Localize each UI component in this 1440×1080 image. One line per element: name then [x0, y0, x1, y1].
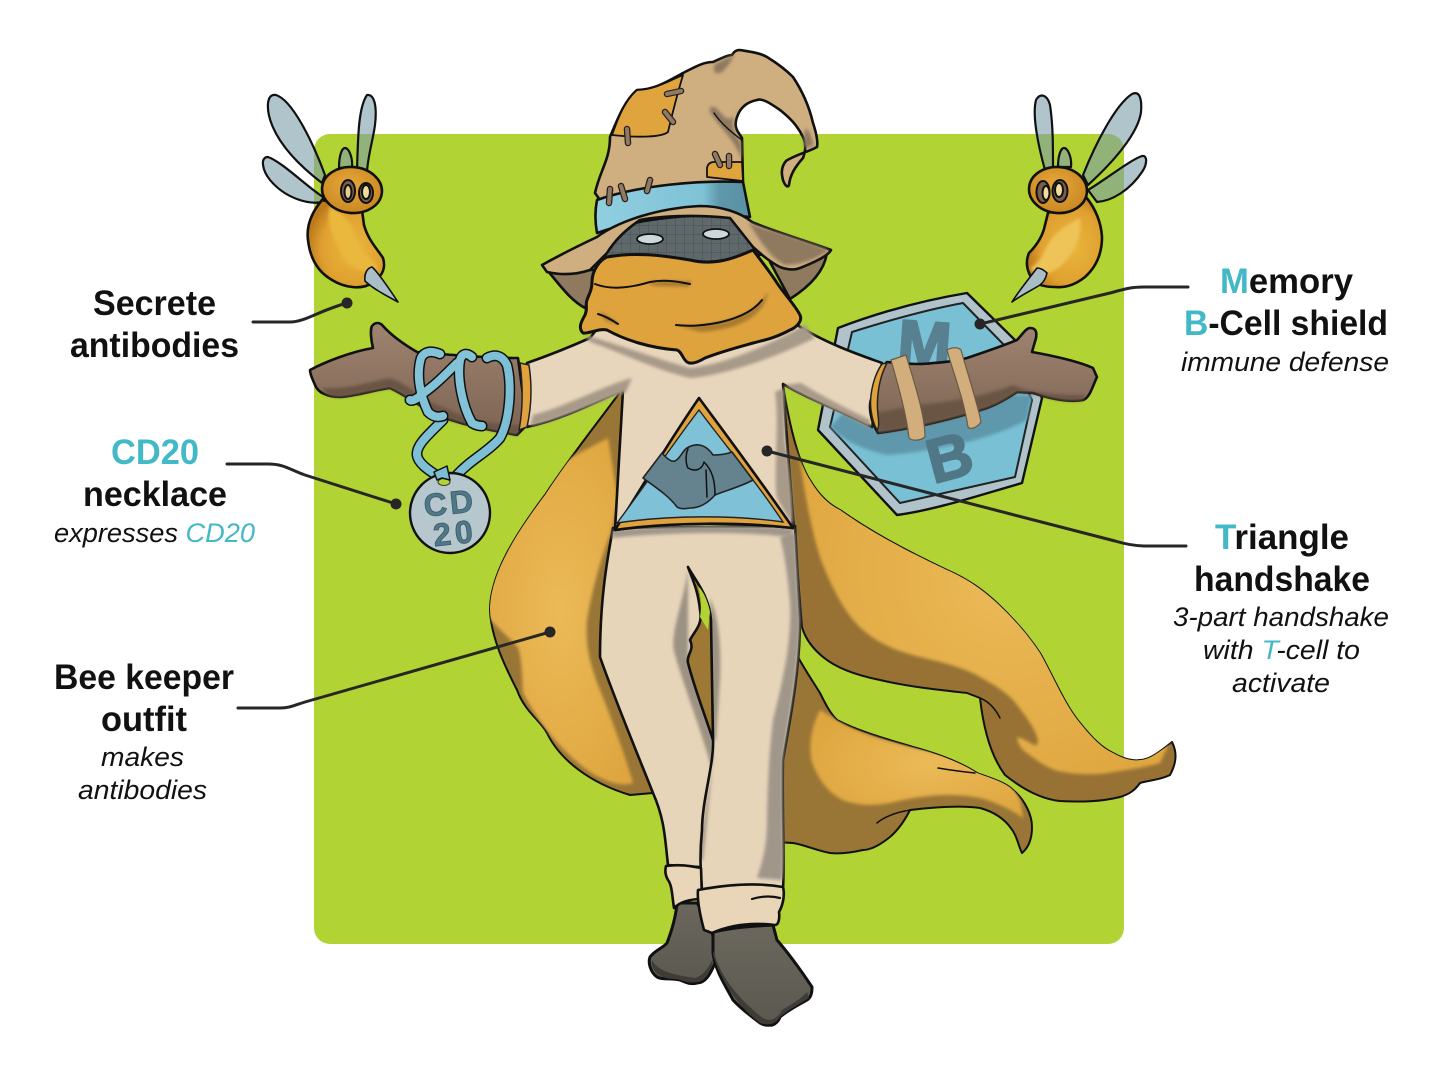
shield [818, 293, 1042, 515]
cape: lower right tail [784, 658, 1033, 854]
trousers [600, 526, 800, 892]
label: triangle handshake: handshake [1194, 560, 1370, 599]
glove shadow [322, 378, 520, 435]
brim right shade [748, 222, 829, 265]
gap between the legs [688, 567, 713, 740]
label: triangle handshake: Triangle [1215, 518, 1349, 557]
left cuff [665, 865, 702, 908]
bee body [1027, 197, 1102, 287]
leader line: bee keeper outfit [238, 626, 556, 708]
bee wings [1035, 93, 1146, 202]
label: memory B-cell shield: Memory [1220, 262, 1354, 301]
label: triangle handshake [1173, 518, 1389, 698]
bee head [1027, 165, 1089, 215]
stitches [609, 91, 729, 203]
triangle emblem [615, 398, 793, 530]
bee body [308, 200, 384, 287]
left arm with glove [310, 323, 531, 435]
green seen between legs [698, 586, 710, 630]
leader line: memory B-cell shield [974, 287, 1188, 330]
hat patch small [707, 162, 743, 181]
label: CD20 necklace: expresses CD20 [54, 518, 255, 548]
letter B: B [919, 419, 980, 497]
medal number: 20 [431, 513, 478, 553]
trouser shading inner leg [673, 567, 720, 860]
label: CD20 necklace [54, 433, 255, 548]
hat brim rear flaps [547, 252, 827, 308]
medal text: CD [422, 482, 478, 524]
left shoe [649, 903, 715, 984]
bee stinger [365, 267, 398, 302]
label: secrete antibodies [70, 284, 239, 365]
character illustration [310, 50, 1190, 1025]
leader line: triangle handshake [762, 446, 1186, 546]
label: bee keeper outfit: makes [101, 742, 184, 772]
green background panel [314, 134, 1124, 944]
mesh face [600, 215, 760, 265]
blue ribbons around arm with medal cord [410, 352, 510, 476]
ribbon knot [434, 466, 450, 480]
tan strap [947, 348, 981, 428]
leader line: CD20 necklace [227, 464, 402, 510]
shield shadow [830, 395, 1032, 455]
CD20 medal [410, 466, 490, 553]
neck shadow [585, 325, 815, 378]
leader line: secrete antibodies [253, 298, 352, 322]
bee eyes [341, 180, 373, 203]
cape: upper right tail [783, 370, 1190, 802]
bee wings [263, 95, 376, 203]
sleeve shadows [530, 378, 871, 526]
left eye [637, 234, 663, 244]
letter M: M [895, 306, 954, 382]
label: memory B-cell shield: B-Cell shield [1184, 304, 1388, 343]
label: bee keeper outfit: outfit [101, 700, 187, 739]
trouser cuffs [665, 865, 784, 933]
hat cone [595, 50, 817, 200]
orange cuff [519, 363, 531, 430]
right eye [703, 229, 729, 239]
label: memory B-cell shield: immune defense [1181, 347, 1389, 377]
label: memory B-cell shield [1181, 262, 1389, 377]
tan strap [891, 355, 925, 440]
cape: left drape [489, 392, 674, 796]
hat fold shading [710, 54, 813, 160]
handshake [643, 445, 753, 509]
blue hat band [596, 182, 750, 233]
glove shadow [877, 385, 1085, 433]
bee: upper right [1012, 93, 1146, 302]
orange cuff [871, 363, 887, 430]
scarf fold shading [598, 281, 768, 332]
scarf folds [595, 281, 762, 326]
label: CD20 necklace: CD20 [111, 433, 199, 472]
scarf [580, 250, 801, 363]
wizard hat [542, 50, 831, 274]
bee highlight [1030, 218, 1081, 274]
right cuff [698, 884, 784, 933]
label: triangle handshake: with T-cell to [1203, 635, 1360, 665]
waist shadow [612, 526, 795, 538]
bee eyes [1036, 180, 1068, 203]
trouser shading right leg [757, 532, 800, 880]
bee stinger [1012, 268, 1047, 302]
label: secrete antibodies: Secrete [93, 284, 216, 323]
label: bee keeper outfit: antibodies [78, 775, 207, 805]
bee head [320, 164, 384, 216]
label: triangle handshake: 3-part handshake [1173, 602, 1389, 632]
tunic torso and sleeves [527, 318, 882, 530]
label: bee keeper outfit [54, 658, 234, 805]
hat brim front [542, 206, 831, 274]
label: bee keeper outfit: Bee keeper [54, 658, 234, 697]
bee highlight [329, 206, 378, 271]
shoe rim shadow [652, 950, 809, 1024]
bee: upper left [263, 95, 398, 302]
medal hole [438, 478, 450, 486]
label: secrete antibodies: antibodies [70, 326, 239, 365]
shoes [649, 903, 812, 1025]
label: triangle handshake: activate [1232, 668, 1330, 698]
hat patch large [612, 75, 683, 137]
right arm with glove [870, 328, 1097, 440]
label: CD20 necklace: necklace [83, 475, 227, 514]
right shoe [713, 925, 812, 1025]
